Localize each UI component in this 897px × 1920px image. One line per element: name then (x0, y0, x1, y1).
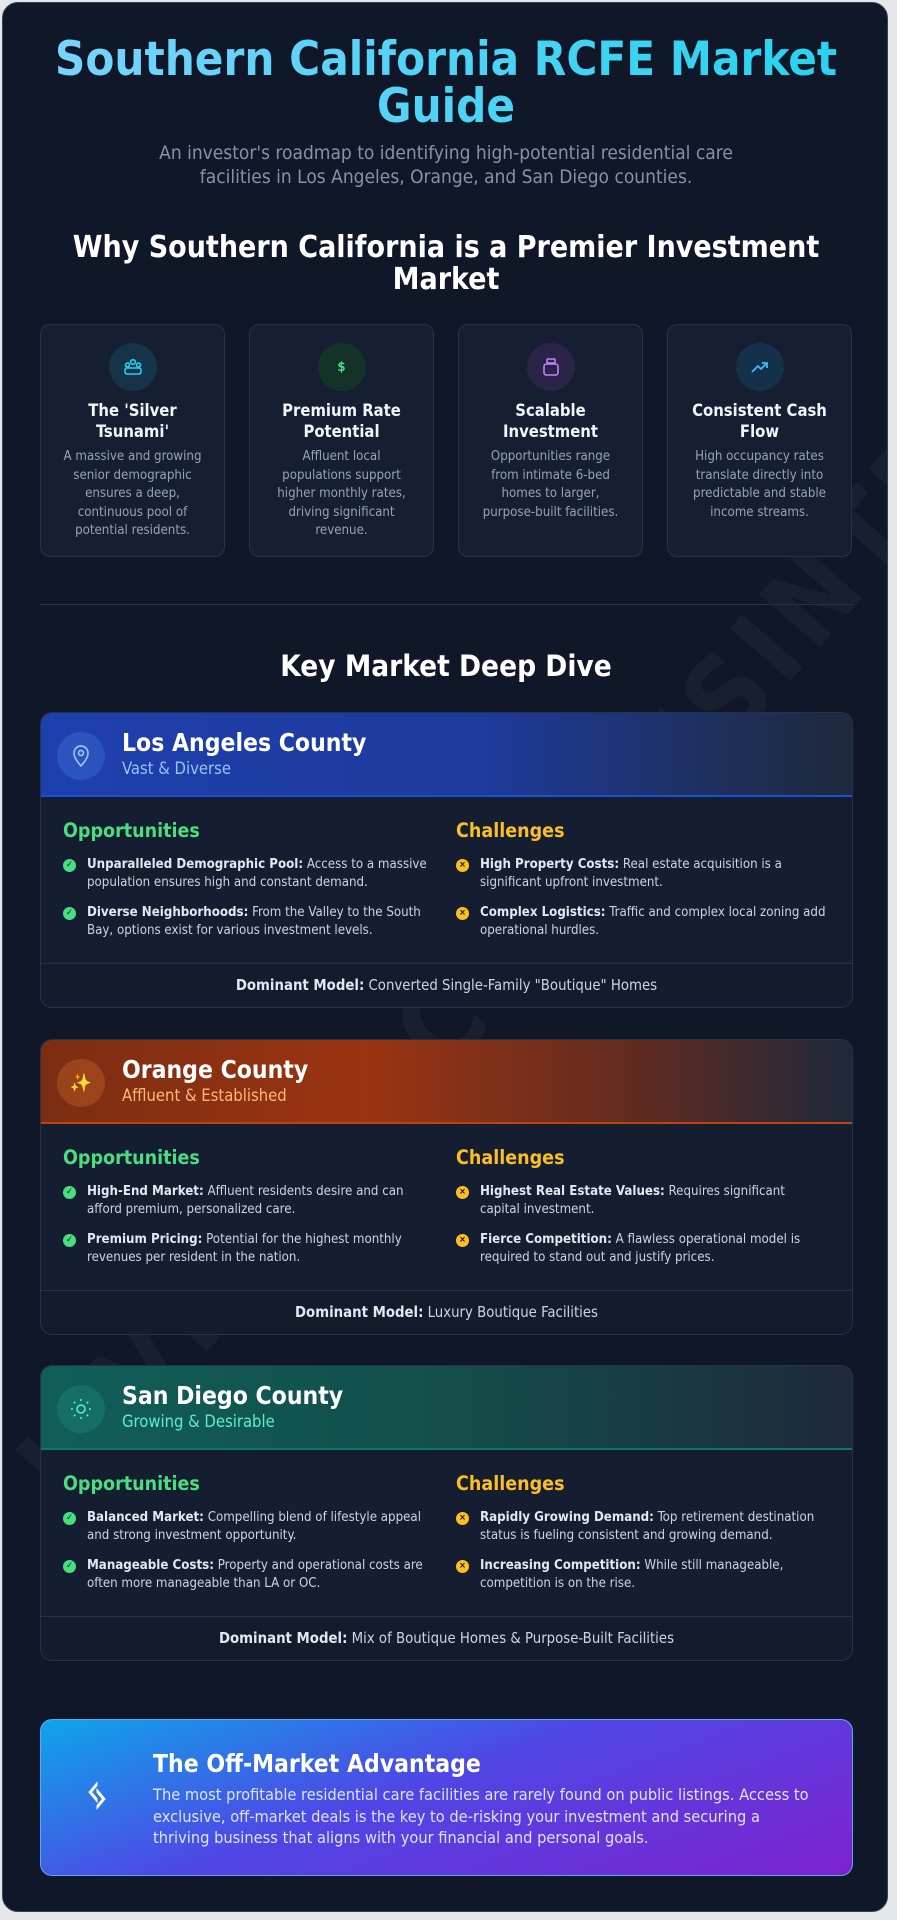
opportunities: OC: ✓ (66, 1187, 73, 1197)
card: premium rate: Premium Rate Potential (282, 401, 401, 441)
opportunities: SD: Opportunities (63, 1472, 200, 1495)
challenges: OC: Challenges (456, 1146, 565, 1169)
challenges: SD: × (459, 1561, 466, 1571)
icon: trend (736, 343, 784, 391)
callout title: The Off-Market Advantage (153, 1749, 481, 1778)
opportunities: LA (63, 819, 427, 938)
opportunities: LA: Diverse Neighborhoods: From the Valley to the South Bay, options exist for various investment levels. (87, 905, 421, 938)
challenges: LA: Challenges (456, 819, 565, 842)
title (3, 36, 889, 130)
title: Southern California RCFE Market (55, 32, 837, 87)
challenges: SD: Challenges (456, 1472, 565, 1495)
opportunities: SD: ✓ (66, 1513, 73, 1523)
header: LA: Vast & Diverse (122, 759, 231, 778)
icon: sparkles: ✨ (70, 1072, 92, 1094)
panel: san diego county (40, 1365, 853, 1661)
callout text: thriving business that aligns with your financial and personal goals. (153, 1828, 649, 1847)
footer: OC: Dominant Model: Luxury Boutique Facilities (295, 1304, 598, 1321)
challenges: SD: Increasing Competition: While still manageable, competition is on the rise. (480, 1558, 783, 1591)
header: LA (41, 713, 852, 797)
card: cash flow: High occupancy rates translate directly into predictable and stable income streams. (693, 449, 826, 520)
header: LA: Los Angeles County (122, 728, 366, 757)
subtitle: An investor's roadmap to identifying high-potential residential care facilities in Los Angeles, Orange, and San Diego counties. (159, 142, 733, 188)
footer: SD (41, 1616, 852, 1662)
callout text (152, 1785, 809, 1847)
card: silver tsunami: A massive and growing senior demographic ensures a deep, continuous pool of potential residents. (64, 449, 201, 538)
icon: people (108, 343, 156, 391)
footer: OC (41, 1290, 852, 1336)
header: SD: San Diego County (122, 1381, 343, 1410)
header: SD: Growing & Desirable (122, 1412, 275, 1431)
icon: jar (526, 343, 574, 391)
challenges: OC (456, 1146, 800, 1265)
card: premium rate (249, 324, 434, 557)
title: Guide (377, 79, 515, 134)
opportunities: LA: Opportunities (63, 819, 200, 842)
opportunities: SD: Manageable Costs: Property and operational costs are often more manageable than LA or OC. (87, 1558, 423, 1591)
challenges: LA: × (459, 860, 466, 870)
footer: LA: Dominant Model: Converted Single-Family "Boutique" Homes (236, 977, 657, 994)
challenges: OC: Highest Real Estate Values: Requires significant capital investment. (480, 1184, 785, 1217)
card: cash flow (667, 324, 852, 557)
opportunities: OC: Opportunities (63, 1146, 200, 1169)
opportunities: LA: ✓ (66, 908, 73, 918)
opportunities: OC (63, 1146, 404, 1265)
challenges: LA: High Property Costs: Real estate acquisition is a significant upfront investment. (480, 857, 782, 890)
challenges: SD: Rapidly Growing Demand: Top retirement destination status is fueling consistent and growing demand. (480, 1510, 814, 1543)
card: scalable: Opportunities range from intimate 6-bed homes to larger, purpose-built facilities. (483, 449, 618, 520)
opportunities: OC: Premium Pricing: Potential for the highest monthly revenues per resident in the nation. (87, 1232, 402, 1265)
icon: sun (57, 1385, 105, 1433)
challenges: LA: Complex Logistics: Traffic and complex local zoning add operational hurdles. (480, 905, 825, 938)
header: SD (41, 1366, 852, 1450)
callout text: The most profitable residential care facilities are rarely found on public listings. Access to exclusive, off-market deals is the key to de-risking your investment and securing a (153, 1785, 809, 1826)
card: silver tsunami: The 'Silver Tsunami' (88, 401, 177, 441)
opportunities: SD: Balanced Market: Compelling blend of lifestyle appeal and strong investment opportunity. (87, 1510, 421, 1543)
card: cash flow: Consistent Cash Flow (692, 401, 827, 441)
callout: off-market advantage (40, 1719, 853, 1876)
icon: handshake: ᛃ (85, 1772, 109, 1818)
icon: pin (57, 732, 105, 780)
challenges: LA: × (459, 908, 466, 918)
challenges: OC: × (459, 1187, 466, 1197)
icon: dollar: $ (337, 360, 346, 374)
opportunities: LA: Unparalleled Demographic Pool: Access to a massive population ensures high and constant demand. (87, 857, 427, 890)
opportunities: OC: ✓ (66, 1235, 73, 1245)
card: silver tsunami (40, 324, 225, 557)
footer: SD: Dominant Model: Mix of Boutique Homes & Purpose-Built Facilities (219, 1630, 674, 1647)
challenges: OC: × (459, 1235, 466, 1245)
challenges: SD (456, 1472, 814, 1591)
header: OC (41, 1040, 852, 1124)
heading: why southern california: Why Southern California is a Premier Investment Market (73, 230, 819, 297)
header: OC: Orange County (122, 1055, 308, 1084)
icon: dollar (318, 343, 366, 391)
panel: orange county (40, 1039, 853, 1335)
opportunities: OC: High-End Market: Affluent residents desire and can afford premium, personalized care. (87, 1184, 404, 1217)
heading: key market deep dive: Key Market Deep Dive (280, 649, 612, 683)
header: OC: Affluent & Established (122, 1086, 287, 1105)
icon: sparkles (57, 1059, 105, 1107)
challenges: SD: × (459, 1513, 466, 1523)
footer: LA (41, 963, 852, 1009)
opportunities: LA: ✓ (66, 860, 73, 870)
card: premium rate: Affluent local populations support higher monthly rates, driving significant revenue. (277, 449, 406, 538)
challenges: LA (456, 819, 825, 938)
panel: los angeles county (40, 712, 853, 1008)
card: scalable (458, 324, 643, 557)
card: scalable: Scalable Investment (503, 401, 598, 441)
challenges: OC: Fierce Competition: A flawless operational model is required to stand out and justify prices. (480, 1232, 800, 1265)
opportunities: SD (63, 1472, 423, 1591)
opportunities: SD: ✓ (66, 1561, 73, 1571)
